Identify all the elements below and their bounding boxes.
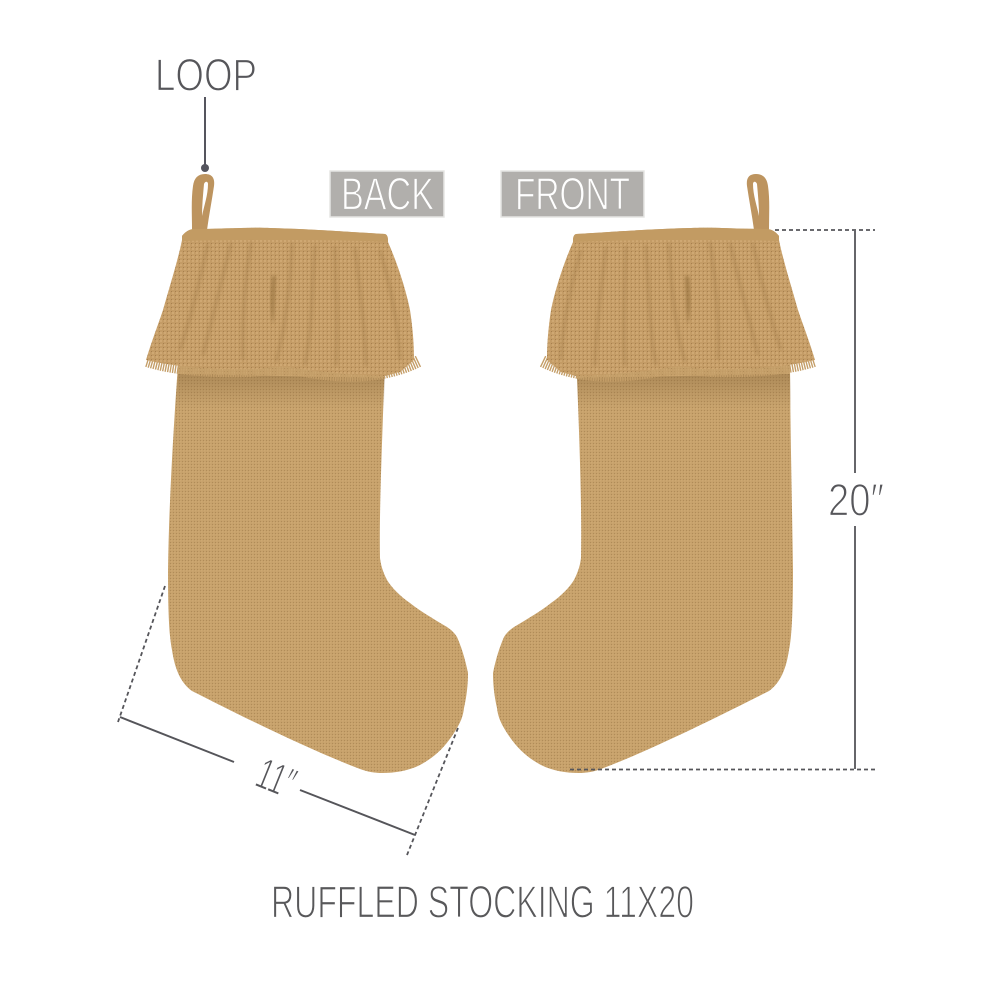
loop: back: [192, 174, 214, 230]
stocking: front view: [493, 174, 815, 773]
dimension: 11 inches width: [118, 586, 458, 855]
loop: front: [747, 174, 769, 230]
ruffle band: back: [182, 228, 388, 242]
pleats: front: [561, 242, 781, 366]
stocking: back view: [146, 174, 468, 773]
ruffle slit: front: [685, 276, 690, 325]
label: LOOP: LOOP: [155, 50, 257, 100]
ruffle fringe: back: [147, 361, 419, 376]
tag: FRONT: FRONT: [515, 168, 630, 220]
body: back: [168, 350, 468, 773]
ruffle fringe: front: [542, 361, 814, 376]
body shade: front: [577, 374, 791, 408]
ruffle: back: [146, 228, 414, 376]
ruffle: front: [547, 228, 815, 376]
label: 11 inches: 11″: [249, 749, 303, 809]
ruffle band: front: [573, 228, 779, 242]
tag: BACK: BACK: [341, 168, 434, 220]
body shade: back: [175, 374, 385, 408]
title: RUFFLED STOCKING 11X20: [271, 876, 694, 928]
ruffle slit: back: [271, 276, 276, 325]
pleats: back: [180, 242, 400, 366]
body: front: [493, 350, 793, 773]
label: LOOP: [155, 50, 257, 172]
label: 20 inches: 20″: [828, 474, 884, 526]
